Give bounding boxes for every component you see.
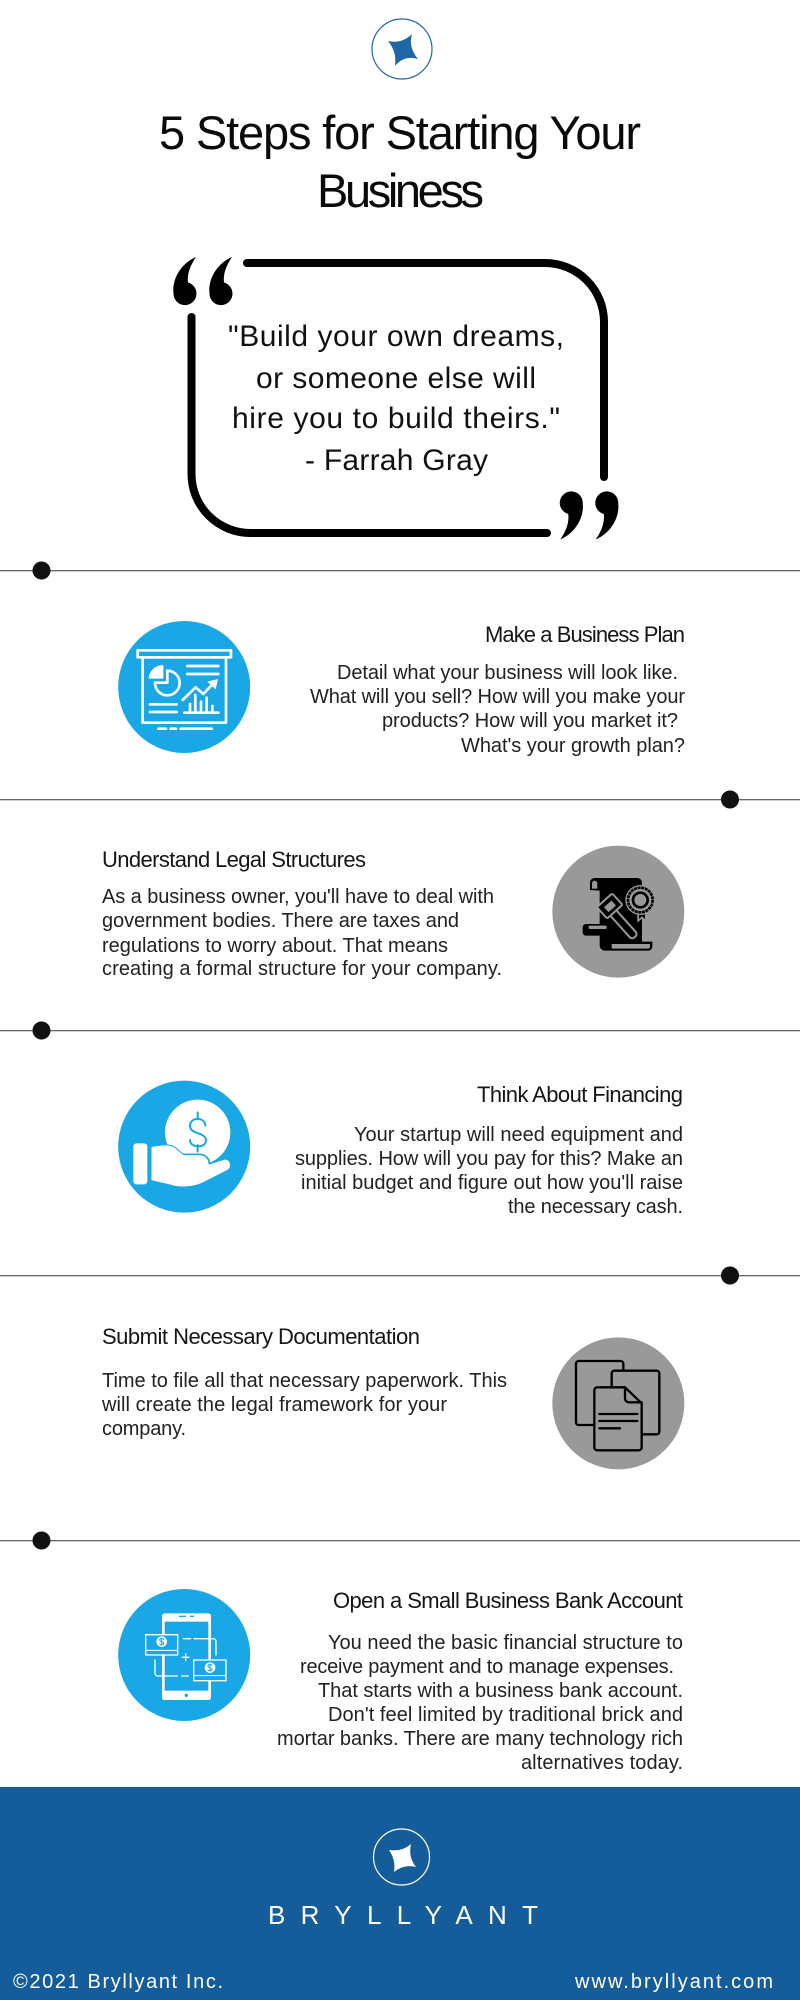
- divider with dot 2: [0, 790, 800, 808]
- text block: As a business owner, you'll have to deal with: [102, 886, 494, 908]
- panel: step 1 make a business plan: [118, 621, 685, 757]
- panel: step 4 submit necessary documentation: [101, 1324, 684, 1469]
- text block: Time to file all that necessary paperwork. This: [102, 1370, 507, 1392]
- text block: company.: [102, 1418, 186, 1440]
- text block: Your startup will need equipment and: [354, 1124, 683, 1146]
- text block: receive payment and to manage expenses.: [300, 1656, 674, 1678]
- icon: hand holding coin: [118, 1081, 250, 1213]
- text block: supplies. How will you pay for this? Make an: [295, 1148, 683, 1170]
- text block: Detail what your business will look like.: [337, 662, 678, 684]
- title: 5 Steps for Starting Your: [159, 106, 641, 159]
- text block: [102, 886, 502, 980]
- text block: What's your growth plan?: [461, 735, 685, 757]
- text block: government bodies. There are taxes and: [102, 910, 459, 932]
- heading: Understand Legal Structures: [102, 847, 366, 872]
- text block: What will you sell? How will you make your: [310, 686, 685, 708]
- text block: products? How will you market it?: [382, 710, 678, 732]
- title: Business: [317, 164, 484, 217]
- copyright: ©2021 Bryllyant Inc.: [13, 1971, 223, 1993]
- icon: presentation board: [118, 621, 250, 753]
- panel: step 5 open a small business bank account: [118, 1588, 683, 1774]
- quote text: or someone else will: [256, 362, 536, 395]
- website: www.bryllyant.com: [574, 1971, 773, 1993]
- divider with dot 1: [0, 562, 800, 580]
- text block: You need the basic financial structure to: [328, 1632, 683, 1654]
- heading: Make a Business Plan: [485, 622, 685, 647]
- quote text: "Build your own dreams,: [228, 320, 564, 353]
- text block: mortar banks. There are many technology rich: [277, 1728, 683, 1750]
- icon: closing quotation marks: [560, 491, 618, 540]
- text block: [295, 1124, 683, 1218]
- text block: [310, 662, 685, 757]
- text block: initial budget and figure out how you'll raise: [301, 1172, 683, 1194]
- quote text: - Farrah Gray: [305, 444, 488, 477]
- quote text: [228, 320, 564, 477]
- divider with dot 3: [0, 1022, 800, 1040]
- text block: [277, 1632, 683, 1774]
- panel: step 2 understand legal structures: [102, 846, 684, 980]
- heading: Think About Financing: [477, 1082, 683, 1107]
- text block: [101, 1370, 507, 1440]
- text block: alternatives today.: [521, 1752, 683, 1774]
- logo: top star badge: [372, 19, 432, 79]
- panel: step 3 think about financing: [118, 1081, 683, 1218]
- text block: will create the legal framework for your: [101, 1394, 447, 1416]
- logo: footer star badge: [374, 1829, 430, 1885]
- icon: legal scroll and gavel: [552, 846, 684, 978]
- divider with dot 5: [0, 1532, 800, 1550]
- quote frame: [192, 263, 604, 533]
- icon: opening quotation marks: [173, 257, 232, 305]
- title: [159, 106, 641, 217]
- icon: stacked documents: [552, 1337, 684, 1469]
- text block: Don't feel limited by traditional brick and: [328, 1704, 683, 1726]
- text block: regulations to worry about. That means: [102, 935, 448, 957]
- panel: footer: [0, 1787, 800, 2000]
- heading: Open a Small Business Bank Account: [333, 1588, 683, 1613]
- quote text: hire you to build theirs.": [232, 402, 560, 435]
- icon: phone with money transfer: [118, 1589, 250, 1721]
- text block: That starts with a business bank account.: [318, 1680, 683, 1702]
- brand name: BRYLLYANT: [268, 1900, 538, 1930]
- divider with dot 4: [0, 1266, 800, 1284]
- text block: the necessary cash.: [508, 1196, 683, 1218]
- text block: creating a formal structure for your company.: [102, 958, 502, 980]
- heading: Submit Necessary Documentation: [102, 1324, 420, 1349]
